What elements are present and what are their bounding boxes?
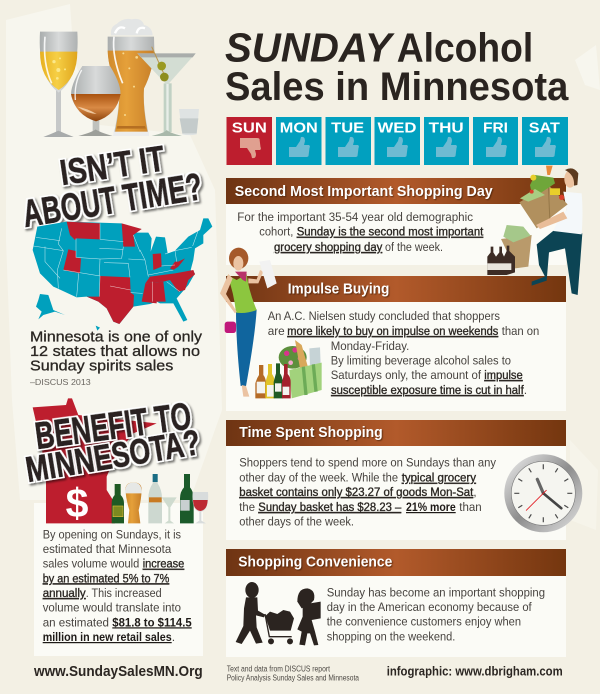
text: Minnesota statement bbox=[30, 329, 202, 375]
panel: shopping convenience bbox=[226, 549, 566, 657]
source credit: Policy Analysis Sunday Sales and Minnesota bbox=[227, 674, 359, 683]
map: permissive states in blue bbox=[33, 218, 212, 324]
panel header bbox=[226, 276, 566, 302]
source note: –DISCUS 2013 bbox=[30, 377, 91, 387]
tile: Saturday: SAT bbox=[529, 121, 560, 137]
panel text: than bbox=[459, 500, 482, 514]
rear bag seam bbox=[548, 185, 550, 223]
text: benefit paragraph: annually bbox=[43, 586, 87, 600]
icon: vermouth bottle bbox=[148, 474, 162, 523]
tile: Thursday: THU bbox=[429, 121, 464, 137]
heading line: benefit to: BENEFIT TO bbox=[33, 396, 194, 458]
tile: Monday bbox=[276, 117, 322, 165]
panel header bbox=[226, 549, 566, 576]
panel: impulse buying bbox=[226, 276, 566, 411]
icon: vermouth label bbox=[149, 497, 162, 502]
text: benefit paragraph: estimated that Minnesota bbox=[43, 542, 172, 556]
icon: small beer bbox=[125, 483, 142, 523]
clock bezel bbox=[504, 454, 582, 532]
map: US states Sunday sales bbox=[33, 218, 212, 331]
panel header bbox=[226, 420, 566, 446]
panel body bbox=[226, 204, 566, 265]
panel body bbox=[226, 302, 566, 411]
panel text: other days of the week. bbox=[239, 515, 354, 529]
icon: shot glass bbox=[179, 109, 199, 135]
panel heading: Second Most Important Shopping Day bbox=[235, 184, 493, 200]
map: Alaska bbox=[36, 294, 65, 319]
panel text: An A.C. Nielsen study concluded that shoppers bbox=[268, 309, 500, 323]
woman dress bbox=[227, 274, 257, 313]
tile: Friday: FRI bbox=[483, 121, 508, 137]
illustration: man carrying grocery bags bbox=[487, 166, 582, 295]
panel text bbox=[237, 210, 484, 254]
panel text: basket contains only $23.27 of goods Mon-Sat bbox=[239, 485, 474, 499]
text: benefit paragraph: By opening on Sundays, it is bbox=[43, 527, 181, 541]
purse bbox=[225, 322, 236, 333]
tile: Sunday bbox=[226, 117, 272, 165]
panel text: grocery shopping day bbox=[274, 240, 383, 254]
clock hands bbox=[526, 479, 561, 510]
icon: martini glass bbox=[137, 47, 196, 136]
day tiles bbox=[226, 117, 568, 165]
clock ticks bbox=[514, 464, 572, 522]
icon: shoppers silhouette with cart bbox=[236, 582, 321, 645]
title: Sales in Minnesota bbox=[225, 65, 569, 109]
icon: red wine bbox=[193, 500, 208, 511]
text: benefit paragraph: by an estimated 5% to 7% bbox=[43, 571, 169, 585]
panel text: the bbox=[239, 500, 255, 514]
heading: isn't it about time bbox=[20, 139, 205, 236]
woman foot bbox=[242, 385, 249, 397]
tile: Thursday bbox=[424, 117, 469, 165]
heading line: about time: ABOUT TIME? bbox=[20, 166, 205, 236]
panel body bbox=[226, 576, 566, 657]
panel text: susceptible exposure time is cut in half bbox=[331, 383, 524, 397]
tile: Monday: MON bbox=[280, 121, 318, 137]
panel text: other day of the week. While the bbox=[239, 471, 398, 485]
panel text: of the week. bbox=[385, 240, 443, 254]
text: benefit paragraph: volume would translate into bbox=[43, 601, 181, 615]
panel text: than on bbox=[502, 324, 539, 338]
text: Minnesota statement: Sunday spirits sales bbox=[30, 358, 174, 375]
text: benefit paragraph bbox=[43, 527, 192, 644]
flowers bbox=[279, 346, 307, 369]
title bbox=[225, 25, 569, 109]
panel text: Sunday has become an important shopping bbox=[327, 586, 545, 600]
tile: Tuesday: TUE bbox=[331, 121, 365, 137]
green shopping bag bbox=[289, 363, 322, 398]
panel text: Sunday basket has $28.23 – bbox=[258, 500, 401, 514]
panel text: 21% more bbox=[406, 500, 456, 514]
text: benefit paragraph: increase bbox=[143, 557, 184, 571]
heading line: isn't it: ISN’T IT bbox=[58, 139, 167, 193]
woman arms bbox=[220, 270, 263, 313]
icon: drinks group bbox=[40, 19, 199, 137]
tile: Wednesday: WED bbox=[378, 121, 416, 137]
icon: vermouth cap bbox=[153, 474, 158, 482]
icon: wine glass bbox=[192, 492, 208, 523]
infographic credit: infographic: www.dbrigham.com bbox=[387, 664, 563, 679]
groceries bbox=[520, 166, 564, 202]
panel text: typical grocery bbox=[402, 471, 477, 485]
panel text: By limiting beverage alcohol sales to bbox=[331, 353, 511, 367]
man trousers bbox=[532, 230, 582, 295]
website link: www.SundaySalesMN.Org bbox=[33, 663, 203, 680]
man hair bbox=[565, 168, 578, 186]
panel heading: Shopping Convenience bbox=[238, 555, 392, 571]
bottle six-pack bbox=[487, 246, 515, 275]
text: benefit paragraph: sales volume would bbox=[43, 557, 139, 571]
text: benefit paragraph: million in new retail sales bbox=[43, 630, 172, 644]
text: Minnesota statement: Minnesota is one of only bbox=[30, 329, 202, 346]
icon: beer foam bbox=[125, 483, 142, 493]
man shirt bbox=[553, 192, 582, 234]
panel: benefit text background bbox=[34, 503, 203, 656]
icon: clock bbox=[504, 454, 582, 532]
panel text: , bbox=[473, 485, 477, 499]
icon: champagne flute bbox=[40, 32, 78, 137]
panel: second most important shopping day bbox=[226, 178, 566, 265]
tile: Tuesday bbox=[326, 117, 371, 165]
icon: wine bottle bbox=[180, 474, 194, 523]
front grocery bag bbox=[519, 185, 568, 228]
source credit bbox=[227, 665, 359, 683]
heading line: Minnesota: MINNESOTA? bbox=[23, 423, 203, 490]
panel text bbox=[268, 309, 539, 397]
shopping cart bbox=[265, 610, 294, 644]
panel text: impulse bbox=[484, 368, 523, 382]
baguette bbox=[295, 340, 308, 368]
man head bbox=[564, 170, 576, 188]
panel text: Monday-Friday. bbox=[331, 339, 409, 353]
icon: wine label bbox=[180, 500, 190, 511]
panel text: Saturdays only, the amount of bbox=[331, 368, 482, 382]
panel: time spent shopping bbox=[226, 420, 566, 540]
woman scarf bbox=[235, 272, 247, 282]
panel text: . bbox=[524, 383, 527, 397]
illustration: woman with shopping list bbox=[220, 248, 322, 398]
panel text: For the important 35-54 year old demographic bbox=[237, 210, 473, 224]
panel text bbox=[327, 586, 545, 644]
panel text: Sunday is the second most important bbox=[297, 225, 484, 239]
man arm bbox=[536, 212, 567, 229]
floor grocery bag bbox=[501, 235, 532, 268]
tile: Wednesday bbox=[374, 117, 420, 165]
text: benefit paragraph: . This increased bbox=[86, 586, 162, 600]
text: benefit paragraph: $81.8 to $114.5 bbox=[112, 615, 192, 629]
icon: dollar sign: $ bbox=[66, 480, 89, 526]
shopping list bbox=[259, 260, 277, 288]
panel text: the convenience customers enjoy when bbox=[327, 615, 521, 629]
panel text bbox=[239, 456, 497, 529]
bag stripes bbox=[303, 364, 316, 395]
panel text: cohort, bbox=[259, 225, 293, 239]
shopper woman bbox=[297, 588, 321, 645]
panel text: shopping on the weekend. bbox=[327, 630, 455, 644]
panel text: Shoppers tend to spend more on Sundays than any bbox=[239, 456, 497, 470]
shopper man bbox=[236, 582, 265, 644]
icon: brandy snifter bbox=[71, 66, 121, 136]
text: benefit paragraph: . bbox=[172, 630, 175, 644]
map: restricted states in red bbox=[63, 222, 195, 324]
panel text: day in the American economy because of bbox=[327, 600, 532, 614]
wine bottles bbox=[255, 363, 291, 398]
panel heading: Impulse Buying bbox=[288, 281, 389, 297]
icon: small martini bbox=[162, 497, 177, 523]
tile: Friday bbox=[473, 117, 518, 165]
source credit: Text and data from DISCUS report bbox=[227, 665, 331, 674]
text: benefit paragraph: an estimated bbox=[43, 615, 109, 629]
icon: beer bottle bbox=[112, 484, 124, 523]
newspaper bbox=[309, 347, 321, 367]
map: Hawaii bbox=[96, 326, 100, 331]
shape: Minnesota red silhouette bbox=[33, 398, 157, 523]
clock face bbox=[511, 461, 575, 525]
panel body bbox=[226, 446, 566, 540]
panel text: more likely to buy on impulse on weekends bbox=[287, 324, 498, 338]
icon: bottle label bbox=[113, 506, 123, 517]
text: Minnesota statement: 12 states that allows no bbox=[30, 343, 200, 360]
icon: beer glass with foam bbox=[108, 19, 154, 136]
tile: Sunday: SUN bbox=[232, 121, 267, 137]
icon: small drinks row bbox=[112, 474, 208, 523]
woman jeans bbox=[236, 309, 257, 386]
panel header bbox=[226, 178, 566, 204]
woman head and hair bbox=[229, 248, 248, 271]
title: SUNDAY bbox=[225, 25, 395, 71]
heading: benefit to Minnesota bbox=[23, 396, 203, 490]
floor bag groceries bbox=[503, 225, 531, 242]
tile: Saturday bbox=[522, 117, 568, 165]
title: Alcohol bbox=[397, 25, 533, 71]
panel text: are bbox=[268, 324, 285, 338]
panel heading: Time Spent Shopping bbox=[239, 425, 383, 441]
